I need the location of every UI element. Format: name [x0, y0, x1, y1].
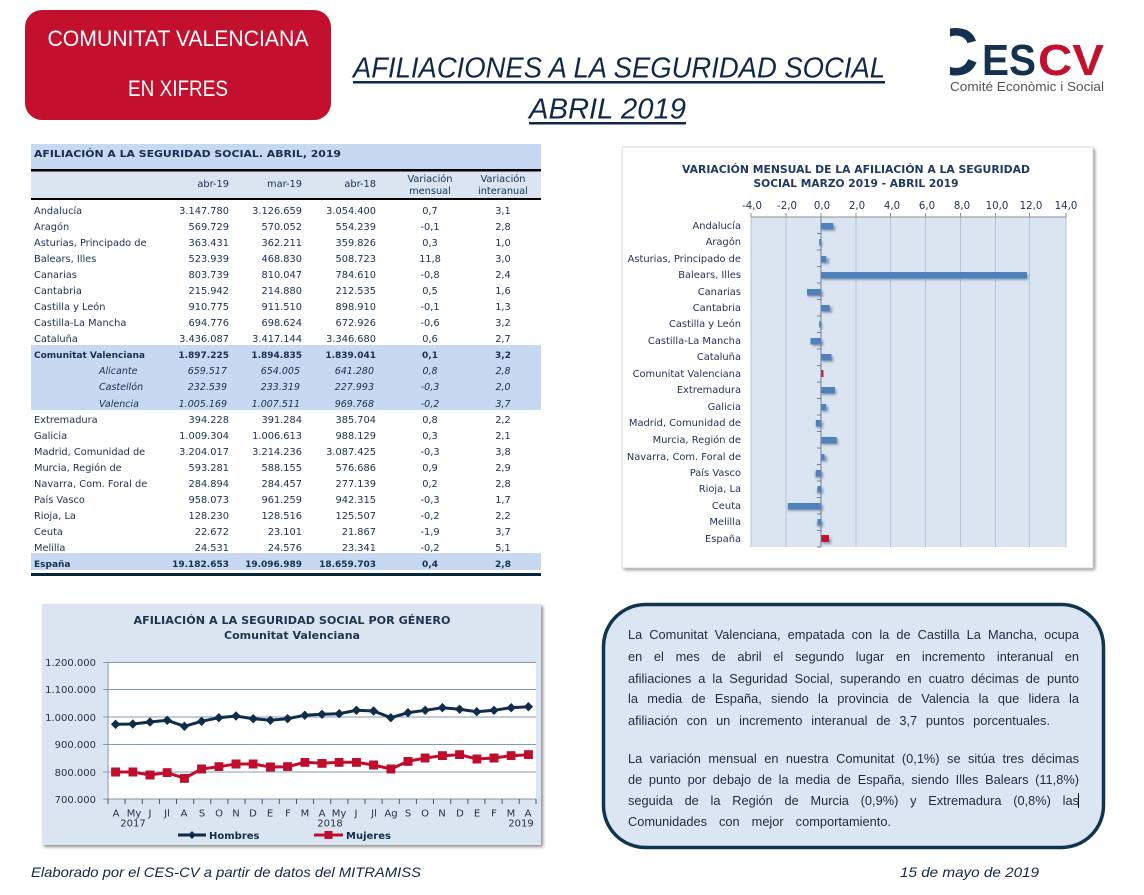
row: Canarias: 803.739 [188, 270, 229, 281]
row: País Vasco: -0,3 [420, 495, 440, 506]
row: Navarra: 277.139 [335, 479, 376, 490]
table column headers: mensual [409, 186, 451, 197]
paragraph 1: la media de España, siendo la provincia de Valencia la que lidera la [628, 691, 1079, 706]
row: Castilla-La Mancha: 694.776 [188, 318, 229, 329]
bar chart x axis labels: 0,0 [814, 201, 830, 212]
line chart month labels: Jl [370, 808, 377, 820]
row: Andalucía: 3.054.400 [326, 206, 376, 217]
title [351, 52, 885, 126]
line chart plot area [108, 662, 536, 799]
paragraph 2: de punto por debajo de la media de España, siendo Illes Balears (11,8%) [628, 772, 1079, 787]
line chart month labels: J [148, 808, 151, 820]
row: Cataluña: 3.417.144 [252, 334, 302, 345]
row: Madrid: 3.087.425 [326, 447, 376, 458]
bar chart title: VARIACIÓN MENSUAL DE LA AFILIACIÓN A LA SEGURIDAD [682, 163, 1030, 176]
line chart month labels: 2018 [317, 818, 343, 830]
row: Castilla y León: 1,3 [495, 302, 511, 313]
row: Canarias [34, 270, 511, 281]
bar chart category labels: Extremadura [677, 385, 741, 396]
line chart month labels: O [215, 808, 223, 820]
row: Alicante [98, 366, 511, 377]
line chart month labels: A [525, 808, 532, 820]
table column headers: interanual [478, 186, 528, 197]
row: Balears: Balears, Illes [34, 254, 96, 265]
row: Galicia: 0,3 [422, 431, 438, 442]
row: Cataluña: 2,7 [495, 334, 511, 345]
line chart month labels: N [232, 808, 240, 820]
bar chart title: SOCIAL MARZO 2019 - ABRIL 2019 [754, 178, 958, 190]
bar chart title [682, 163, 1030, 190]
bar chart x axis labels: 2,0 [849, 201, 865, 212]
bar chart x axis labels: 14,0 [1055, 201, 1077, 212]
line chart month labels: My [332, 808, 346, 820]
row: Cantabria: Cantabria [34, 286, 82, 297]
line chart y axis labels [45, 658, 96, 806]
row: Balears: 523.939 [188, 254, 229, 265]
row: Andalucía: 3,1 [495, 206, 511, 217]
row: Castilla-La Mancha: 3,2 [495, 318, 511, 329]
row: Alicante: Alicante [98, 366, 138, 377]
bar chart category labels: Cantabria [693, 303, 741, 314]
paragraph 2: seguida de la Región de Murcia (0,9%) y Extremadura (0,8%) las [628, 793, 1079, 808]
row: Andalucía [34, 205, 511, 217]
bar chart category labels: País Vasco [690, 467, 741, 479]
row: Comunitat Valenciana: 0,1 [422, 351, 438, 361]
line chart y axis labels: 700.000 [55, 795, 96, 806]
line chart month labels: 2019 [508, 818, 534, 830]
bar chart category labels: Melilla [709, 517, 741, 528]
paragraph 1: La Comunitat Valenciana, empatada con la de Castilla La Mancha, ocupa [628, 627, 1079, 642]
bar chart category labels: Murcia, Región de [653, 434, 741, 446]
line chart y axis labels: 1.200.000 [45, 658, 96, 669]
line chart month labels: N [438, 808, 446, 820]
row: Castilla-La Mancha: 698.624 [261, 318, 302, 329]
bars: comunidades [788, 223, 1027, 526]
row: Aragón: 569.729 [188, 222, 229, 233]
row: Rioja: 128.230 [188, 511, 229, 522]
line chart month labels: Jl [163, 808, 170, 820]
legend: Mujeres: Mujeres [346, 831, 391, 842]
bar chart category labels: Canarias [698, 287, 741, 298]
bar chart category labels: Madrid, Comunidad de [629, 418, 741, 429]
row: Castellón: -0,3 [421, 382, 439, 393]
row: Rioja: Rioja, La [34, 511, 76, 522]
row: Extremadura: 385.704 [335, 415, 376, 426]
row: Comunitat Valenciana: 1.897.225 [178, 351, 229, 361]
badge: Comunitat Valenciana en xifres: EN XIFRES [128, 76, 228, 101]
row: Galicia: 2,1 [495, 431, 511, 442]
row: Canarias: 784.610 [335, 270, 376, 281]
row: Asturias: 362.211 [261, 238, 302, 249]
line series: Mujeres [116, 755, 528, 778]
table column headers [197, 173, 528, 197]
row: Cantabria: 215.942 [188, 286, 229, 297]
row: Navarra: 2,8 [495, 479, 511, 490]
row: Valencia: 1.007.511 [252, 399, 300, 410]
row: Comunitat Valenciana: 1.839.041 [325, 351, 376, 361]
row: Asturias: 363.431 [188, 238, 229, 249]
row: País Vasco: 961.259 [261, 495, 302, 506]
row: Madrid: 3.214.236 [252, 447, 302, 458]
row: Melilla: 5,1 [495, 543, 511, 554]
row: Aragón: 2,8 [495, 222, 511, 233]
row: España: España [34, 560, 71, 570]
row: Madrid: 3.204.017 [179, 447, 229, 458]
line chart title: AFILIACIÓN A LA SEGURIDAD SOCIAL POR GÉNERO [134, 614, 451, 627]
line chart month labels: E [267, 808, 273, 820]
row: Cataluña: Cataluña [34, 334, 78, 345]
row: Madrid: Madrid, Comunidad de [34, 447, 145, 458]
row: Madrid [34, 447, 511, 458]
row: Galicia: Galicia [34, 431, 67, 442]
row: Andalucía: 3.147.780 [179, 206, 229, 217]
logo: CES CV: Comité Econòmic i Social [950, 79, 1104, 94]
table column headers: abr-19 [197, 179, 229, 190]
table heading: AFILIACIÓN A LA SEGURIDAD SOCIAL. ABRIL, 2019 [34, 147, 341, 160]
bar chart category labels: Castilla-La Mancha [648, 336, 741, 347]
row: Valencia: -0,2 [421, 399, 439, 410]
row: País Vasco: País Vasco [34, 494, 85, 506]
row: Comunitat Valenciana: 1.894.835 [251, 351, 302, 361]
row: Extremadura: 394.228 [188, 415, 229, 426]
row: Murcia [34, 462, 511, 474]
bar chart category labels: Cataluña [697, 352, 741, 363]
row: Aragón [34, 221, 511, 233]
row: Aragón: 554.239 [335, 222, 376, 233]
row: Ceuta: 21.867 [342, 527, 376, 538]
row: Canarias: 810.047 [261, 270, 302, 281]
row: Canarias: -0,8 [420, 270, 440, 281]
row: Rioja: 128.516 [261, 511, 302, 522]
row: Murcia: 593.281 [188, 463, 229, 474]
panel: text box background [604, 604, 1104, 848]
paragraph 1: en el mes de abril el segundo lugar en incremento interanual en [628, 649, 1079, 664]
legend: Hombres [178, 831, 260, 842]
row: Rioja: 2,2 [495, 511, 511, 522]
bar chart x axis labels: 6,0 [919, 201, 935, 212]
row: Navarra: Navarra, Com. Foral de [34, 479, 147, 490]
panel: line chart afiliación por género [42, 604, 543, 847]
line chart month labels: My [127, 808, 141, 820]
line chart month labels: F [491, 808, 497, 820]
row: España: 0,4 [422, 560, 438, 570]
row: Alicante: 2,8 [495, 366, 511, 377]
line chart month labels: A [113, 808, 120, 820]
row: Asturias: 1,0 [495, 238, 511, 249]
line chart month labels: J [354, 808, 357, 820]
line chart y axis labels: 1.100.000 [45, 685, 96, 696]
paragraph 2 [628, 751, 1079, 829]
row: Comunitat Valenciana: Comunitat Valenciana [34, 351, 145, 361]
row: Murcia: 2,9 [495, 463, 511, 474]
row: Murcia: 0,9 [422, 463, 438, 474]
row: Extremadura: 0,8 [422, 415, 438, 426]
row: Alicante: 659.517 [188, 366, 227, 377]
row: Castellón [99, 382, 511, 393]
row: Cantabria: 214.880 [261, 286, 302, 297]
row: Andalucía: 0,7 [422, 206, 438, 217]
line chart title [134, 614, 451, 642]
row: Balears: 468.830 [261, 254, 302, 265]
row: Comunitat Valenciana [34, 351, 511, 361]
bar chart category labels: Asturias, Principado de [628, 254, 741, 265]
footer: date: 15 de mayo de 2019 [900, 864, 1039, 880]
row: Extremadura [34, 415, 511, 426]
row: Murcia: 588.155 [261, 463, 302, 474]
row: España: 18.659.703 [319, 560, 376, 570]
line chart month labels: S [405, 808, 411, 820]
row: Cataluña: 3.346.680 [326, 334, 376, 345]
line chart y axis labels: 800.000 [55, 768, 96, 779]
row: Valencia [99, 399, 511, 410]
paragraph 1: afiliaciones a la Seguridad Social, superando en cuatro décimas de punto [628, 671, 1079, 686]
bar chart category labels: Castilla y León [669, 318, 741, 330]
row: Ceuta: Ceuta [34, 527, 63, 538]
row: Melilla [34, 543, 511, 554]
legend: Mujeres [314, 831, 391, 842]
line chart month labels: A [319, 808, 326, 820]
line chart month labels: D [456, 808, 464, 820]
row: Asturias [34, 238, 511, 249]
bar chart x axis labels: -2,0 [777, 201, 797, 212]
row: Galicia: 1.009.304 [179, 431, 229, 442]
row: Navarra: 284.457 [261, 479, 302, 490]
row: España: 19.096.989 [245, 560, 302, 570]
row: Castilla-La Mancha: -0,6 [420, 318, 440, 329]
row: Melilla: 24.531 [195, 543, 229, 554]
row: Ceuta: -1,9 [420, 527, 440, 538]
line chart month labels: S [199, 808, 205, 820]
paragraph 2: La variación mensual en nuestra Comunitat (0,1%) se sitúa tres décimas [628, 751, 1079, 766]
line series: Hombres [116, 707, 528, 726]
row: Extremadura: 2,2 [495, 415, 511, 426]
row: Extremadura: Extremadura [34, 415, 98, 426]
line chart month labels: M [301, 808, 309, 820]
title: ABRIL 2019 [527, 94, 686, 126]
line chart month labels: 2017 [120, 818, 146, 830]
row: Aragón: Aragón [34, 221, 69, 233]
row: Cantabria: 0,5 [422, 286, 438, 297]
line chart month labels: F [285, 808, 291, 820]
row: Rioja: 125.507 [335, 511, 376, 522]
row: Valencia: 1.005.169 [179, 399, 227, 410]
row: Castilla y León: 910.775 [188, 302, 229, 313]
bar chart category labels: Ceuta [712, 501, 741, 512]
logo: CES CV: CV [1038, 36, 1105, 85]
row: Asturias: Asturias, Principado de [34, 238, 147, 249]
row: Castilla-La Mancha: 672.926 [335, 318, 376, 329]
row: Castellón: 227.993 [335, 382, 374, 393]
row: Comunitat Valenciana: 3,2 [495, 351, 511, 361]
row: Castellón: 232.539 [188, 382, 227, 393]
row: Castilla y León: 911.510 [261, 302, 302, 313]
row: Navarra: 284.894 [188, 479, 229, 490]
row: Castellón: 2,0 [495, 382, 511, 393]
row: Ceuta: 22.672 [195, 527, 229, 538]
row: Castellón: Castellón [99, 382, 143, 393]
row: Navarra [34, 479, 511, 490]
footer: source: Elaborado por el CES-CV a partir de datos del MITRAMISS [31, 864, 422, 880]
table column headers: mar-19 [267, 179, 302, 190]
row: País Vasco: 958.073 [188, 495, 229, 506]
line chart month labels: O [421, 808, 429, 820]
row: Valencia: 3,7 [495, 399, 511, 410]
bar chart category labels: Andalucía [692, 220, 741, 232]
row: Asturias: 359.826 [335, 238, 376, 249]
line chart y axis labels: 900.000 [55, 740, 96, 751]
bar chart category labels: Aragón [706, 236, 741, 248]
line chart y axis labels: 1.000.000 [45, 713, 96, 724]
bar chart category labels [627, 220, 741, 545]
row: Navarra: 0,2 [422, 479, 438, 490]
row: Cataluña: 0,6 [422, 334, 438, 345]
row: Murcia: Murcia, Región de [34, 462, 122, 474]
row: Aragón: 570.052 [261, 222, 302, 233]
row: Cataluña: 3.436.087 [179, 334, 229, 345]
row: Madrid: -0,3 [420, 447, 440, 458]
row: Alicante: 0,8 [422, 366, 438, 377]
row: España: 19.182.653 [172, 560, 229, 570]
row: Balears [34, 254, 511, 265]
bar chart x axis labels [742, 201, 1077, 212]
row: Castilla y León: -0,1 [420, 302, 440, 313]
row: Castilla y León: Castilla y León [34, 301, 106, 313]
line chart month labels: M [507, 808, 515, 820]
row: Alicante: 654.005 [261, 366, 300, 377]
bars: Comunitat Valenciana y España [821, 370, 829, 542]
row: Galicia: 988.129 [335, 431, 376, 442]
row: Castellón: 233.319 [261, 382, 300, 393]
row: España [34, 560, 511, 570]
row: Valencia: 969.768 [335, 399, 374, 410]
paragraph 2: Comunidades con mejor comportamiento. [628, 814, 891, 829]
row: Melilla: Melilla [34, 543, 65, 554]
row: Melilla: 23.341 [342, 543, 376, 554]
row: Canarias: Canarias [34, 270, 77, 281]
row: Aragón: -0,1 [420, 222, 440, 233]
row: País Vasco [34, 494, 511, 506]
row: Valencia: Valencia [99, 399, 139, 410]
row: Rioja: -0,2 [420, 511, 440, 522]
row: Cantabria: 1,6 [495, 286, 511, 297]
row: Cataluña [34, 334, 511, 345]
line chart month labels: D [249, 808, 257, 820]
row: Alicante: 641.280 [335, 366, 374, 377]
row: Melilla: 24.576 [268, 543, 302, 554]
bar chart x axis labels: 12,0 [1020, 201, 1042, 212]
bar chart x axis labels: 4,0 [884, 201, 900, 212]
row: Ceuta: 3,7 [495, 527, 511, 538]
paragraph 1 [628, 627, 1079, 728]
badge: Comunitat Valenciana en xifres: COMUNITAT VALENCIANA [48, 26, 309, 51]
row: España: 2,8 [495, 560, 511, 570]
row: Madrid: 3,8 [495, 447, 511, 458]
bar chart x axis labels: 10,0 [986, 201, 1008, 212]
row: País Vasco: 1,7 [495, 495, 511, 506]
line chart month labels [113, 808, 534, 830]
table column headers: abr-18 [344, 179, 376, 190]
table column headers: Variación [480, 173, 526, 185]
row: Extremadura: 391.284 [261, 415, 302, 426]
row: Castilla-La Mancha [34, 318, 511, 329]
line chart month labels: A [181, 808, 188, 820]
line chart month labels: E [474, 808, 480, 820]
bar chart category labels: Balears, Illes [678, 270, 741, 281]
row: Cantabria [34, 286, 511, 297]
bar chart category labels: Rioja, La [699, 484, 741, 495]
row: Cantabria: 212.535 [335, 286, 376, 297]
title: AFILIACIONES A LA SEGURIDAD SOCIAL [351, 52, 885, 84]
row: Andalucía: 3.126.659 [252, 206, 302, 217]
legend: Hombres: Hombres [209, 831, 260, 842]
table: afiliación por comunidad [31, 144, 541, 576]
bar chart x axis labels: -4,0 [742, 201, 762, 212]
bar chart category labels: Galicia [708, 402, 741, 413]
panel: bar chart variación mensual [622, 147, 1095, 570]
badge: Comunitat Valenciana en xifres [25, 10, 331, 120]
bar chart plot area [751, 217, 1066, 547]
line chart title: Comunitat Valenciana [224, 630, 360, 642]
row: País Vasco: 942.315 [335, 495, 376, 506]
row: Castilla y León [34, 301, 511, 313]
row: Galicia: 1.006.613 [252, 431, 302, 442]
logo: CES CV: ES [982, 36, 1036, 85]
row: Ceuta: 23.101 [268, 527, 302, 538]
row: Andalucía: Andalucía [34, 205, 82, 217]
bar chart category labels: España [705, 534, 741, 545]
line chart month labels: Ag [384, 808, 398, 820]
row: Rioja [34, 511, 511, 522]
row: Castilla-La Mancha: Castilla-La Mancha [34, 318, 126, 329]
row: Asturias: 0,3 [422, 238, 438, 249]
text block: analysis [628, 627, 1079, 829]
row: Balears: 11,8 [419, 254, 441, 265]
bar chart category labels: Comunitat Valenciana [633, 369, 741, 380]
row: Murcia: 576.686 [335, 463, 376, 474]
bar chart category labels: Navarra, Com. Foral de [627, 452, 741, 463]
bar chart shadows [788, 225, 1028, 544]
logo: CES CV: C [930, 15, 978, 90]
row: Melilla: -0,2 [420, 543, 440, 554]
bar chart x axis labels: 8,0 [954, 201, 970, 212]
paragraph 1: afiliación con un incremento interanual de 3,7 puntos porcentuales. [628, 713, 1050, 728]
row: Balears: 508.723 [335, 254, 376, 265]
row: Galicia [34, 431, 511, 442]
logo: CES CV [950, 28, 1104, 91]
row: Canarias: 2,4 [495, 270, 511, 281]
table column headers: Variación [407, 173, 453, 185]
row: Balears: 3,0 [495, 254, 511, 265]
row: Ceuta [34, 527, 511, 538]
row: Castilla y León: 898.910 [335, 302, 376, 313]
